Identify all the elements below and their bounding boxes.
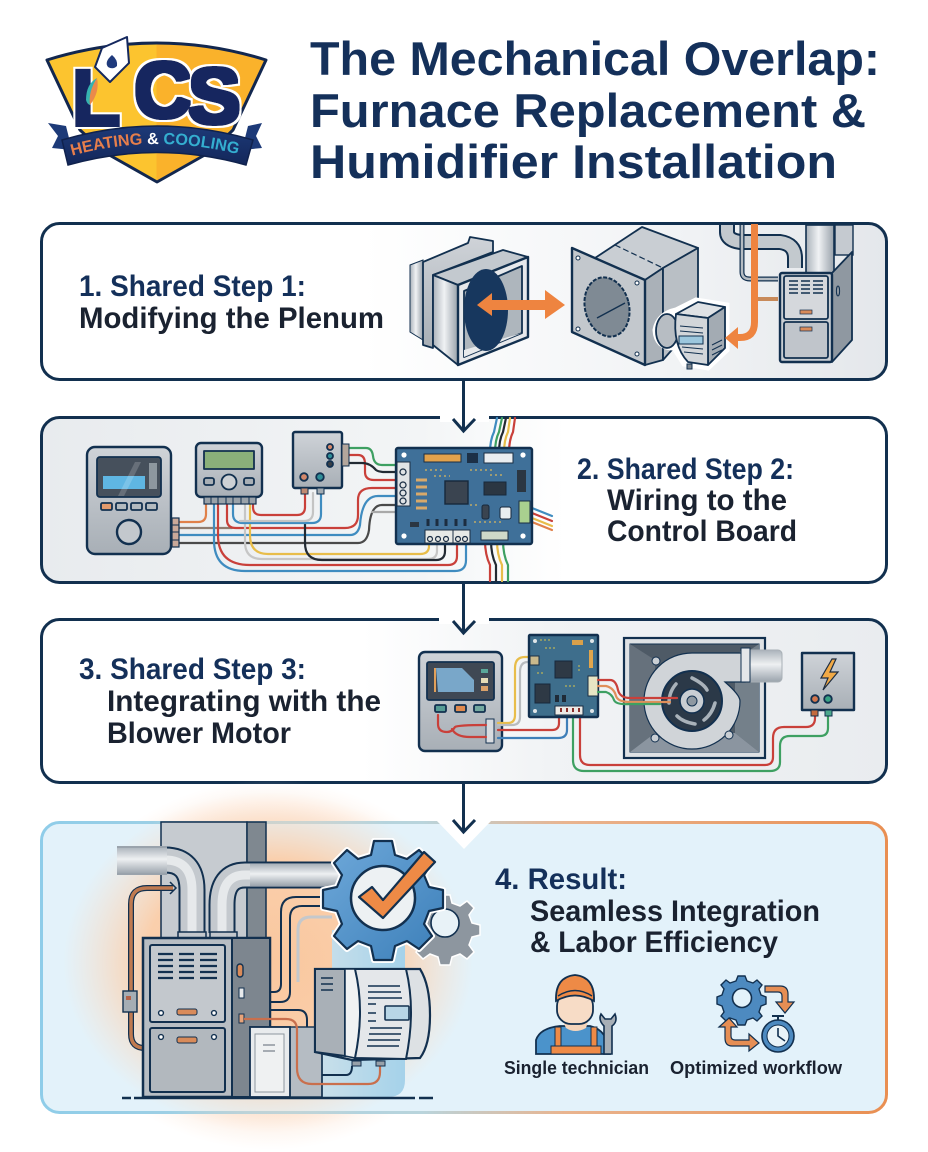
step 4 text: & Labor Efficiency xyxy=(530,926,779,959)
wires: motor leads xyxy=(598,680,677,704)
panel: step 1 xyxy=(42,224,886,380)
title: Furnace Replacement & xyxy=(310,84,866,137)
icon: control board xyxy=(396,448,532,544)
icon: blower motor xyxy=(624,638,782,758)
letters LCS: LCS xyxy=(72,45,241,142)
wiring harness xyxy=(178,418,552,581)
icon: furnace xyxy=(780,252,852,362)
icon: plate with round collar xyxy=(572,227,698,365)
title: Humidifier Installation xyxy=(310,135,837,188)
logo xyxy=(45,36,268,184)
caption: single technician: Single technician xyxy=(504,1057,649,1078)
icon: humidifier xyxy=(315,969,430,1066)
step 3 heading: 3. Shared Step 3: xyxy=(79,653,306,686)
step 1 text: Modifying the Plenum xyxy=(79,302,384,335)
icon: control unit xyxy=(419,652,502,751)
caption: optimized workflow: Optimized workflow xyxy=(670,1057,843,1078)
panel: step 3 xyxy=(42,616,886,782)
icon: humidifier duct xyxy=(322,930,405,1097)
title: The Mechanical Overlap: xyxy=(310,32,880,85)
icon: mini control board xyxy=(529,635,598,717)
wire: orange xyxy=(244,1019,380,1084)
title xyxy=(310,32,880,188)
step 3 text xyxy=(107,685,381,750)
icon: workflow xyxy=(717,976,794,1052)
icon: relay box xyxy=(293,432,349,494)
step 3 text: Blower Motor xyxy=(107,717,292,750)
step 2 text: Control Board xyxy=(607,515,797,548)
arrow: double headed xyxy=(477,290,565,319)
icon: orange tube xyxy=(123,882,176,1048)
glow behind result xyxy=(55,780,485,1150)
step 4 text: Seamless Integration xyxy=(530,895,820,928)
ribbon: HEATING & COOLING xyxy=(70,132,239,156)
wire: pale line xyxy=(298,917,332,982)
icon: technician xyxy=(536,975,616,1054)
wires: blower circuit xyxy=(498,657,828,771)
icon: plenum duct opening xyxy=(410,237,528,365)
icon: humidifier fan xyxy=(655,300,727,369)
step 2 text xyxy=(607,484,797,548)
panel: step 2 xyxy=(42,414,886,582)
arrow: step 1 to step 2 xyxy=(453,381,475,431)
step 4 heading: 4. Result: xyxy=(495,863,627,896)
icon: chimney column xyxy=(161,822,266,938)
icon: furnace xyxy=(143,938,270,1097)
icon: power box xyxy=(802,653,854,716)
arrow: step 3 to result xyxy=(453,784,475,832)
flame tag xyxy=(86,37,129,105)
step 4 text xyxy=(530,895,820,959)
icon: ducts xyxy=(117,847,340,939)
step 3 text: Integrating with the xyxy=(107,685,381,718)
shield xyxy=(47,43,266,182)
wires: dark control lines xyxy=(270,897,352,1075)
icon: gear with check xyxy=(323,841,443,960)
icon: thermostat xyxy=(87,447,179,554)
panel: result xyxy=(42,792,886,1132)
step 2 text: Wiring to the xyxy=(607,484,787,517)
icon: side cabinet xyxy=(250,1027,322,1097)
step 2 heading: 2. Shared Step 2: xyxy=(577,453,794,486)
panel glow xyxy=(63,792,473,1132)
arrow: orange pipe xyxy=(725,224,758,349)
icon: small grey gear xyxy=(410,895,480,965)
ribbon xyxy=(48,123,262,166)
step 1 heading: 1. Shared Step 1: xyxy=(79,270,306,303)
icon: furnace pipes xyxy=(727,225,853,299)
floor line xyxy=(122,1097,433,1099)
arrow: step 2 to step 3 xyxy=(453,584,475,633)
icon: controller xyxy=(196,443,262,504)
